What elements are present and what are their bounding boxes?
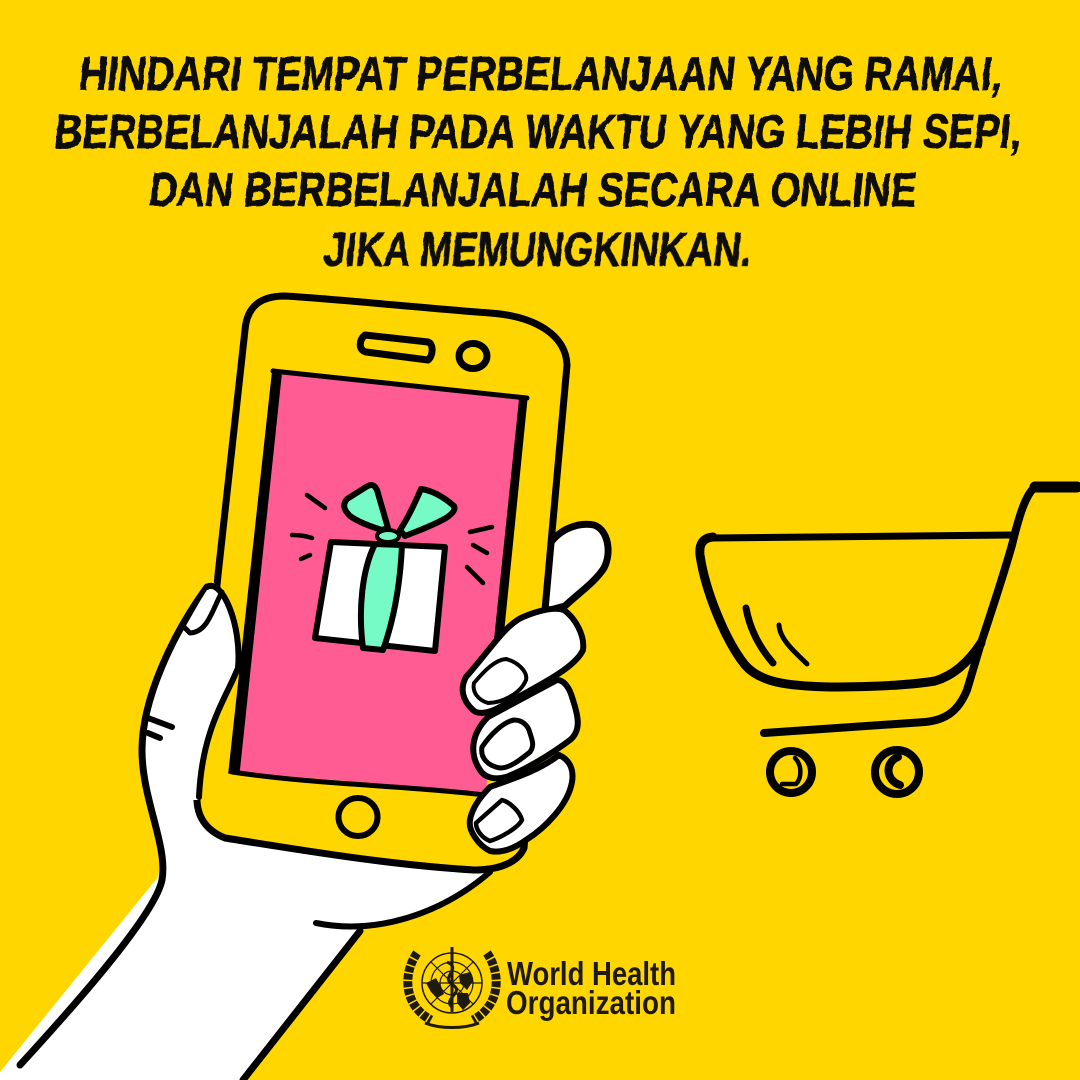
phone body (197, 296, 567, 870)
phone screen (229, 369, 527, 795)
title: JIKA MEMUNGKINKAN. (322, 223, 755, 277)
cart basket (700, 537, 981, 687)
finger two (463, 609, 583, 713)
phone camera (459, 344, 487, 368)
arm and palm (0, 587, 495, 1080)
title (52, 47, 1025, 277)
home button (338, 798, 378, 836)
WHO emblem (408, 947, 496, 1028)
fingers (463, 609, 583, 852)
nail two (482, 720, 533, 768)
logo: World Health Organization (408, 947, 676, 1028)
WHO wordmark: World Health (507, 955, 676, 992)
cart frame and handle (764, 486, 1077, 733)
finger three (473, 680, 578, 778)
finger four (470, 755, 572, 852)
basket shine marks (746, 608, 773, 663)
cart rim (713, 535, 1010, 538)
nail one (474, 659, 526, 703)
WHO wordmark: Organization (506, 984, 676, 1021)
icon: gift (292, 485, 492, 651)
title: DAN BERBELANJALAH SECARA ONLINE (147, 163, 920, 217)
nail three (476, 800, 522, 841)
illustration: hand holding phone (0, 296, 608, 1080)
index finger behind phone (543, 524, 608, 612)
icon: shopping cart (700, 486, 1077, 794)
thumb (148, 582, 240, 800)
phone speaker (360, 335, 432, 360)
left wheel (770, 751, 812, 793)
right wheel (875, 750, 919, 794)
WHO wordmark (506, 955, 676, 1021)
